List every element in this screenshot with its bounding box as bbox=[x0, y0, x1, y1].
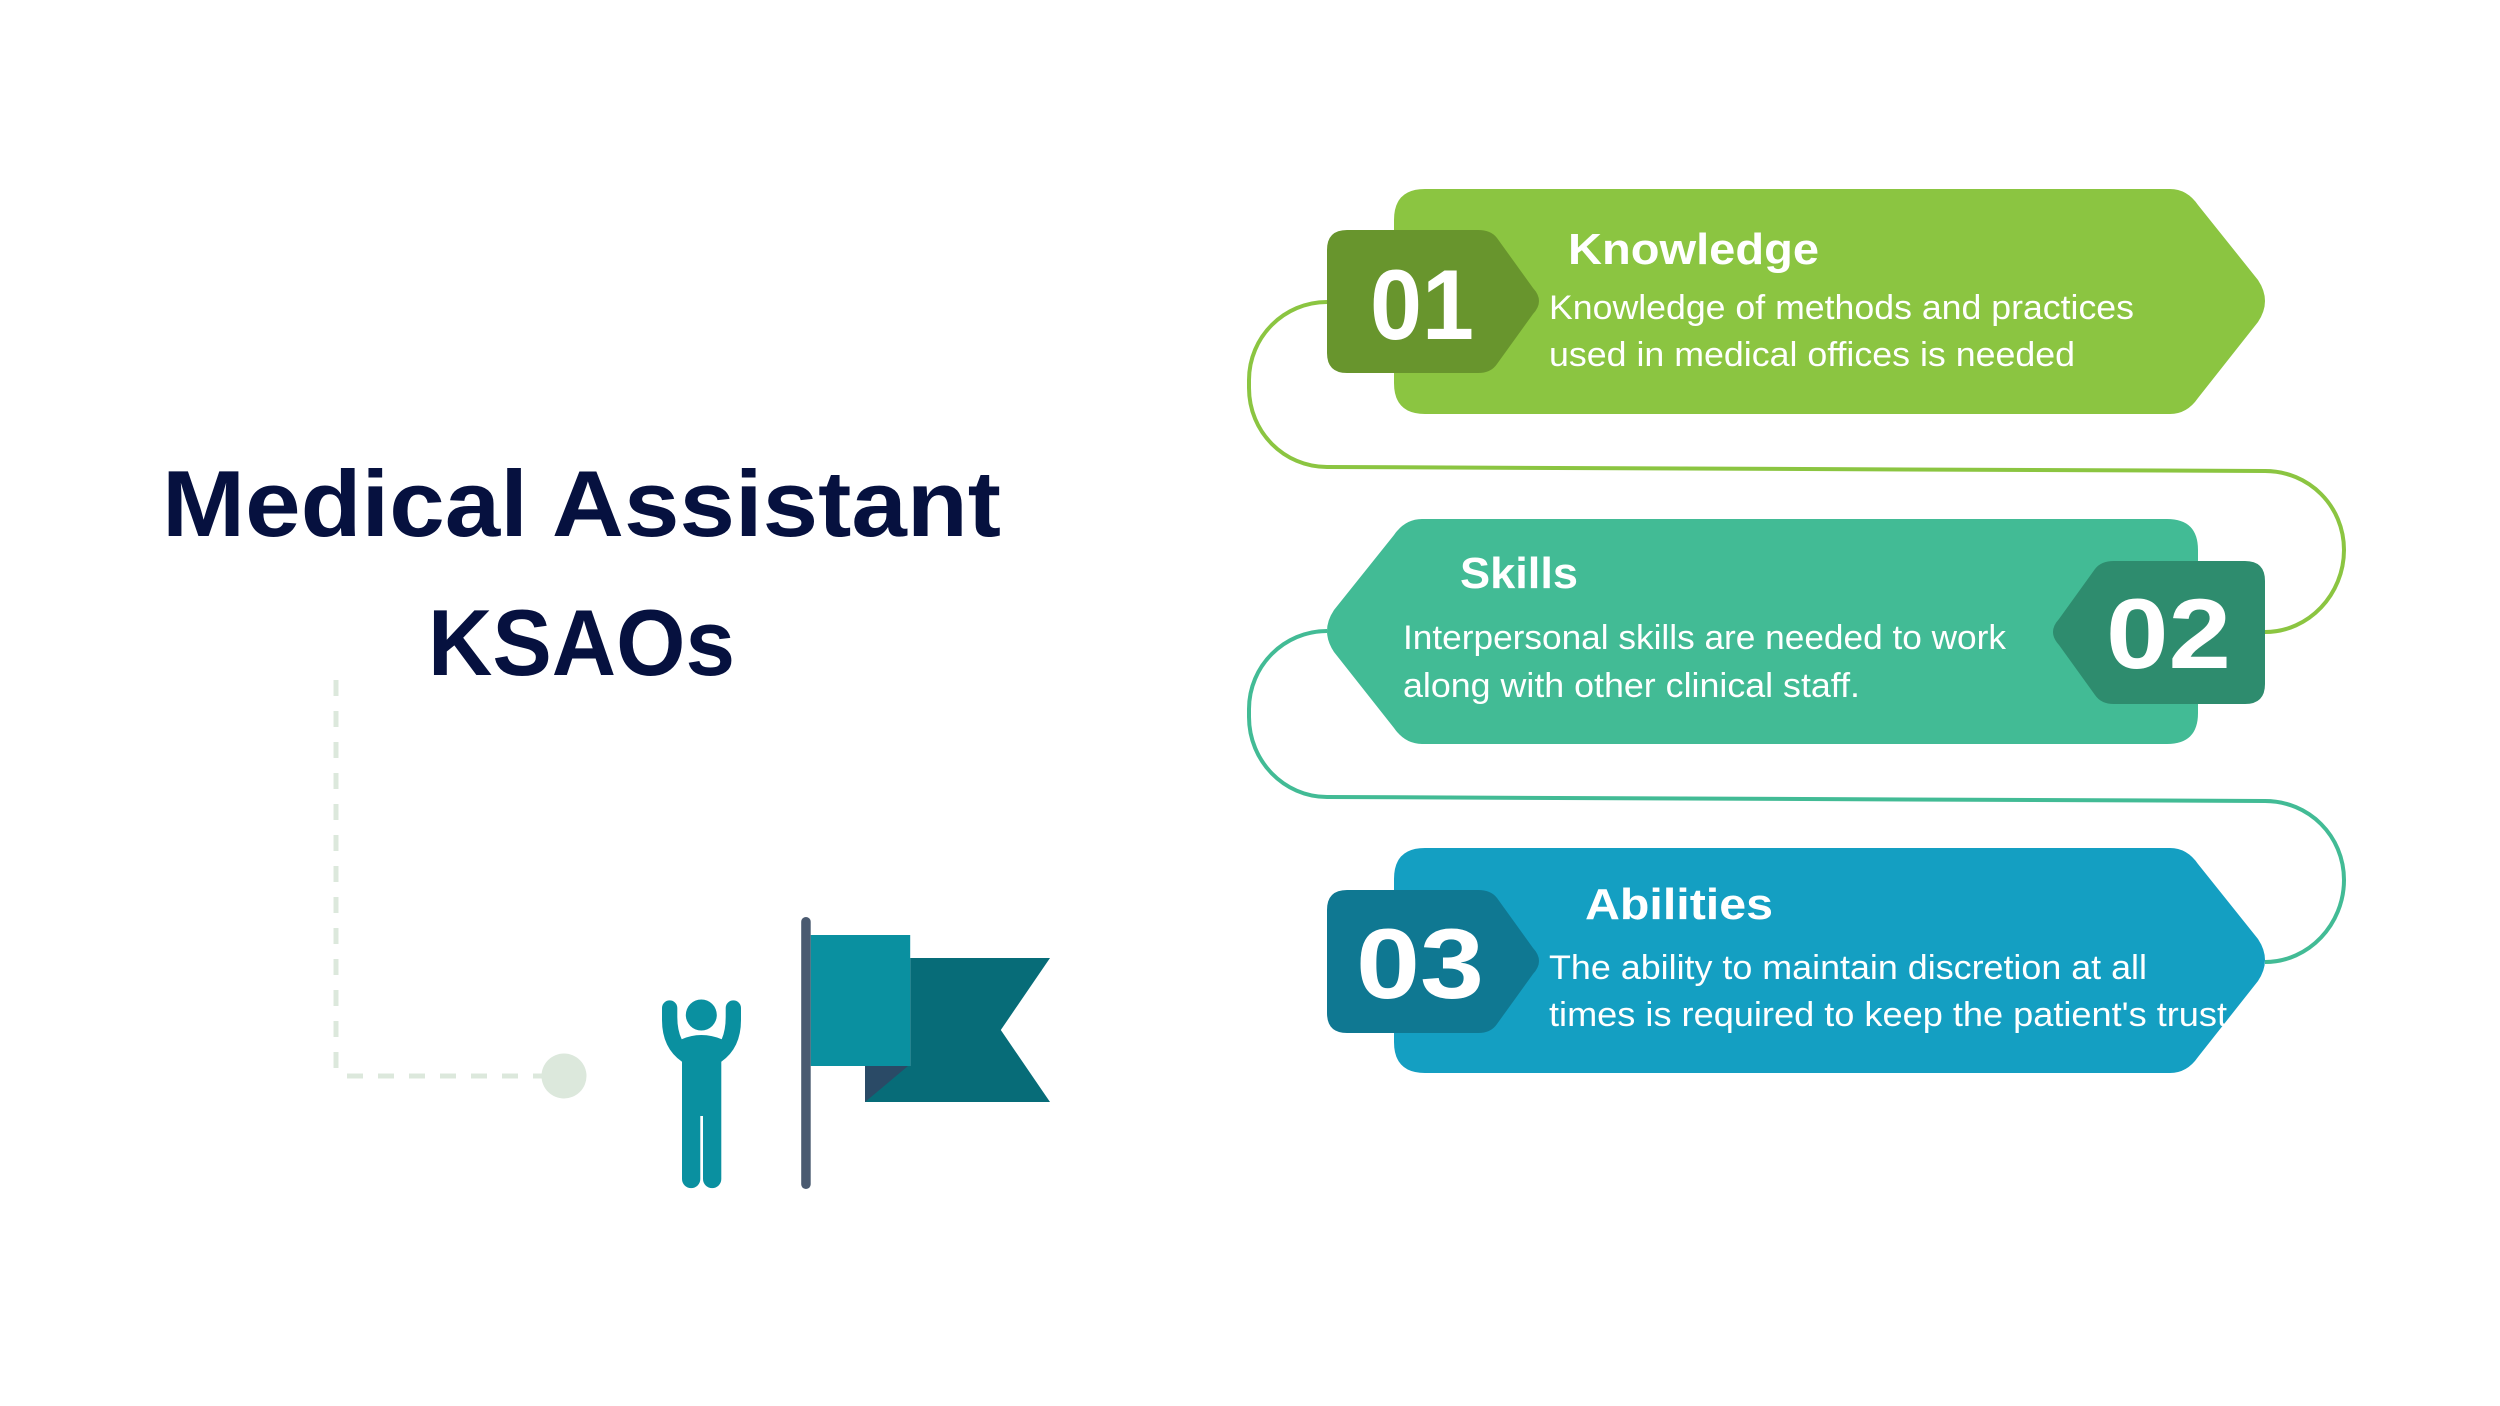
badge: 03 bbox=[1327, 890, 1539, 1033]
panel shape: abilities bbox=[1394, 848, 2265, 1073]
connector: skills to abilities bbox=[1249, 631, 2344, 962]
icon: flag on pole bbox=[801, 917, 1050, 1189]
panel shape: knowledge bbox=[1394, 189, 2265, 414]
number: 02: 02 bbox=[2106, 578, 2231, 689]
description: abilities bbox=[1549, 949, 2228, 1034]
heading: knowledge: Knowledge bbox=[1568, 225, 1819, 274]
title: KSAOs bbox=[428, 590, 735, 695]
badge: 02 bbox=[2053, 561, 2265, 704]
heading: skills: Skills bbox=[1460, 549, 1578, 598]
badge: 01 bbox=[1327, 230, 1539, 373]
marker dot bbox=[542, 1054, 586, 1098]
number: 01: 01 bbox=[1370, 249, 1474, 360]
description: skills: along with other clinical staff. bbox=[1403, 667, 1860, 705]
title bbox=[162, 451, 1001, 695]
connector: knowledge to skills bbox=[1249, 302, 2344, 632]
description: abilities: The ability to maintain discretion at all bbox=[1549, 949, 2147, 987]
description: knowledge: Knowledge of methods and practices bbox=[1549, 289, 2134, 327]
description: skills: Interpersonal skills are needed to work bbox=[1403, 619, 2007, 657]
title: Medical Assistant bbox=[162, 451, 1001, 556]
panel shape: skills bbox=[1327, 519, 2198, 744]
heading: abilities: Abilities bbox=[1585, 880, 1773, 929]
icon: person with raised arms bbox=[662, 1000, 741, 1188]
panel: abilities bbox=[1327, 848, 2265, 1073]
number: 03: 03 bbox=[1356, 908, 1484, 1019]
description: knowledge bbox=[1549, 289, 2134, 374]
description: skills bbox=[1403, 619, 2007, 705]
panel: skills bbox=[1327, 519, 2265, 744]
description: abilities: times is required to keep the patient's trust bbox=[1549, 996, 2228, 1034]
panel: knowledge bbox=[1327, 189, 2265, 414]
dashed path to marker bbox=[336, 680, 543, 1076]
description: knowledge: used in medical offices is needed bbox=[1549, 336, 2075, 374]
